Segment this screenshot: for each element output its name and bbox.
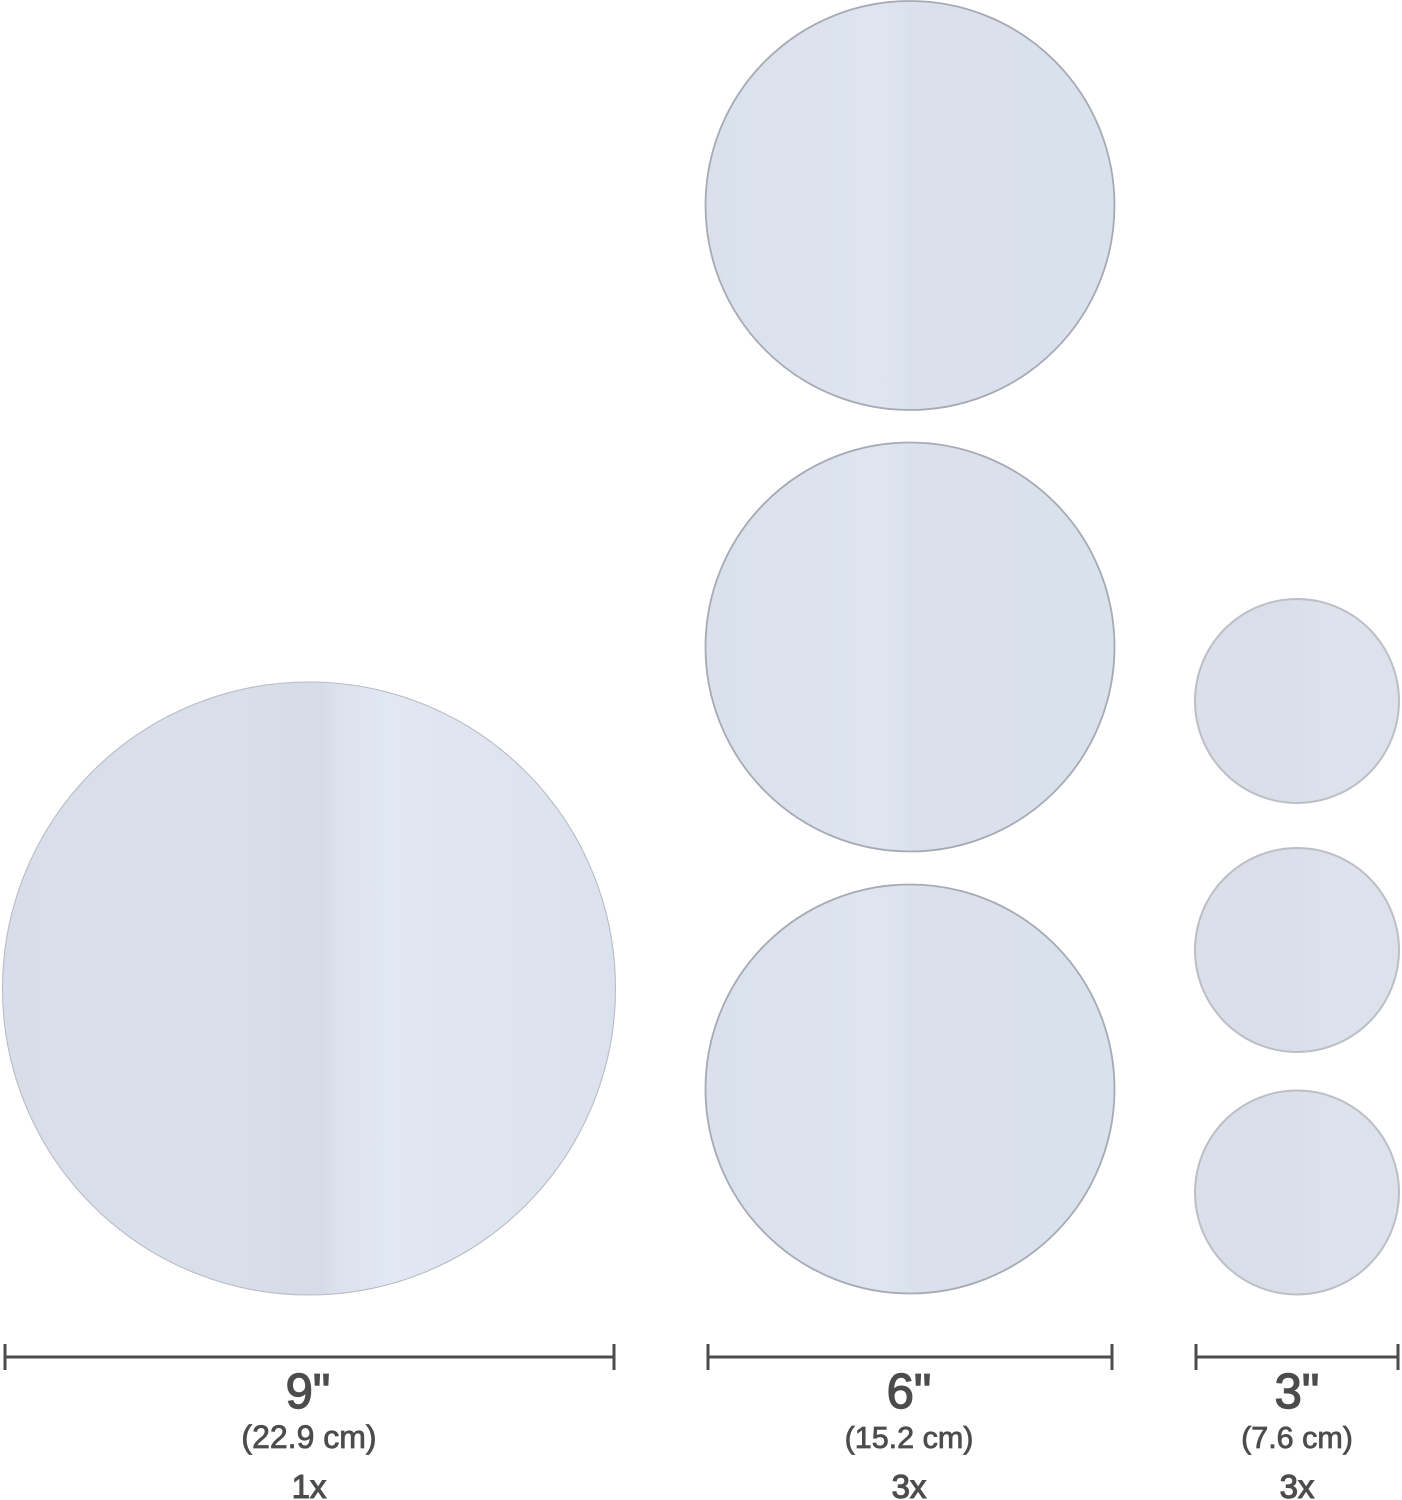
mirror: 3 inch circle, top [1195, 599, 1399, 803]
label: 9 inch size: 9" [286, 1365, 330, 1419]
dimension bar: 9 inch [5, 1344, 614, 1370]
label: 3 inch metric size: (7.6 cm) [1241, 1421, 1353, 1455]
label: 6 inch size: 6" [887, 1365, 931, 1419]
mirror: 3 inch circle, middle [1195, 848, 1399, 1052]
label: 9 inch metric size: (22.9 cm) [241, 1419, 377, 1455]
mirror: 6 inch circle, bottom [706, 884, 1114, 1294]
mirror: 3 inch circle, bottom [1195, 1090, 1399, 1294]
label: 6 inch metric size: (15.2 cm) [845, 1421, 973, 1455]
dimension bar: 6 inch [708, 1344, 1112, 1370]
dimension bar: 3 inch [1196, 1344, 1398, 1370]
mirror: 9 inch circle [2, 682, 616, 1295]
mirror: 6 inch circle, middle [706, 442, 1114, 852]
label: 3 inch size: 3" [1275, 1365, 1319, 1419]
mirror: 6 inch circle, top [706, 1, 1114, 410]
